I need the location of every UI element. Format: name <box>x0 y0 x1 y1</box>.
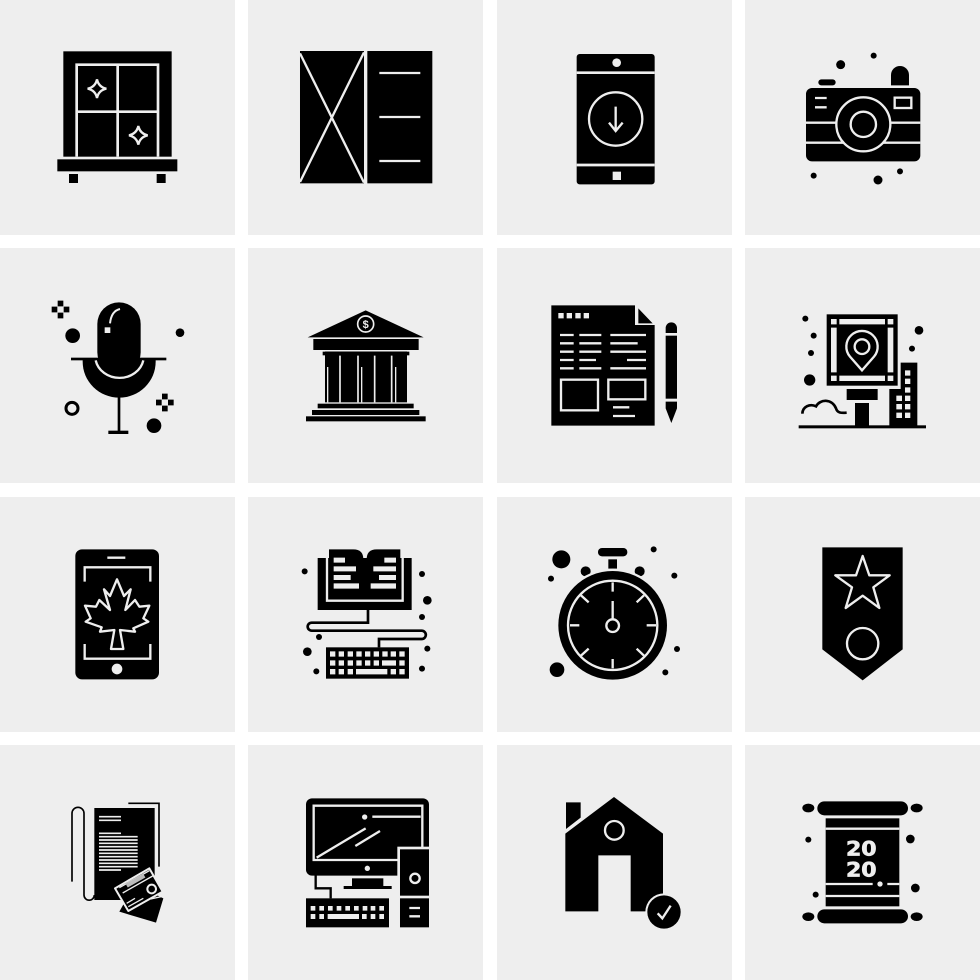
dollar sign: $ <box>363 319 369 331</box>
icon: document and credit cards <box>72 803 163 923</box>
panel: microphone <box>0 248 235 483</box>
year text: 20 <box>846 859 877 882</box>
panel: online book and keyboard <box>248 497 483 732</box>
panel: camera <box>745 0 980 235</box>
panel: verified house <box>497 745 732 980</box>
icon: document and pencil <box>551 305 677 426</box>
icon: window <box>57 51 177 183</box>
year text: 20 <box>846 838 877 861</box>
panel: window <box>0 0 235 235</box>
panel: stopwatch <box>497 497 732 732</box>
icon: online book and keyboard <box>302 549 432 679</box>
icon: microphone <box>52 301 184 434</box>
icon: layout wireframe <box>300 51 432 183</box>
icon: mobile download <box>577 54 655 184</box>
panel: document and credit cards <box>0 745 235 980</box>
panel: military badge <box>745 497 980 732</box>
icon: bank <box>306 310 426 421</box>
icon: phone with maple leaf <box>75 549 159 679</box>
panel: billboard location <box>745 248 980 483</box>
icon: 2020 scroll <box>802 801 923 923</box>
panel: layout wireframe <box>248 0 483 235</box>
icon: camera <box>806 53 920 184</box>
panel: document and pencil <box>497 248 732 483</box>
panel: 2020 scroll <box>745 745 980 980</box>
icon: desktop computer <box>306 798 431 927</box>
panel: phone with maple leaf <box>0 497 235 732</box>
icon: military badge <box>822 547 903 680</box>
panel: mobile download <box>497 0 732 235</box>
icon: billboard location <box>799 314 926 428</box>
panel: desktop computer <box>248 745 483 980</box>
panel: bank <box>248 248 483 483</box>
icon: verified house <box>565 797 683 931</box>
icon: stopwatch <box>548 546 680 682</box>
